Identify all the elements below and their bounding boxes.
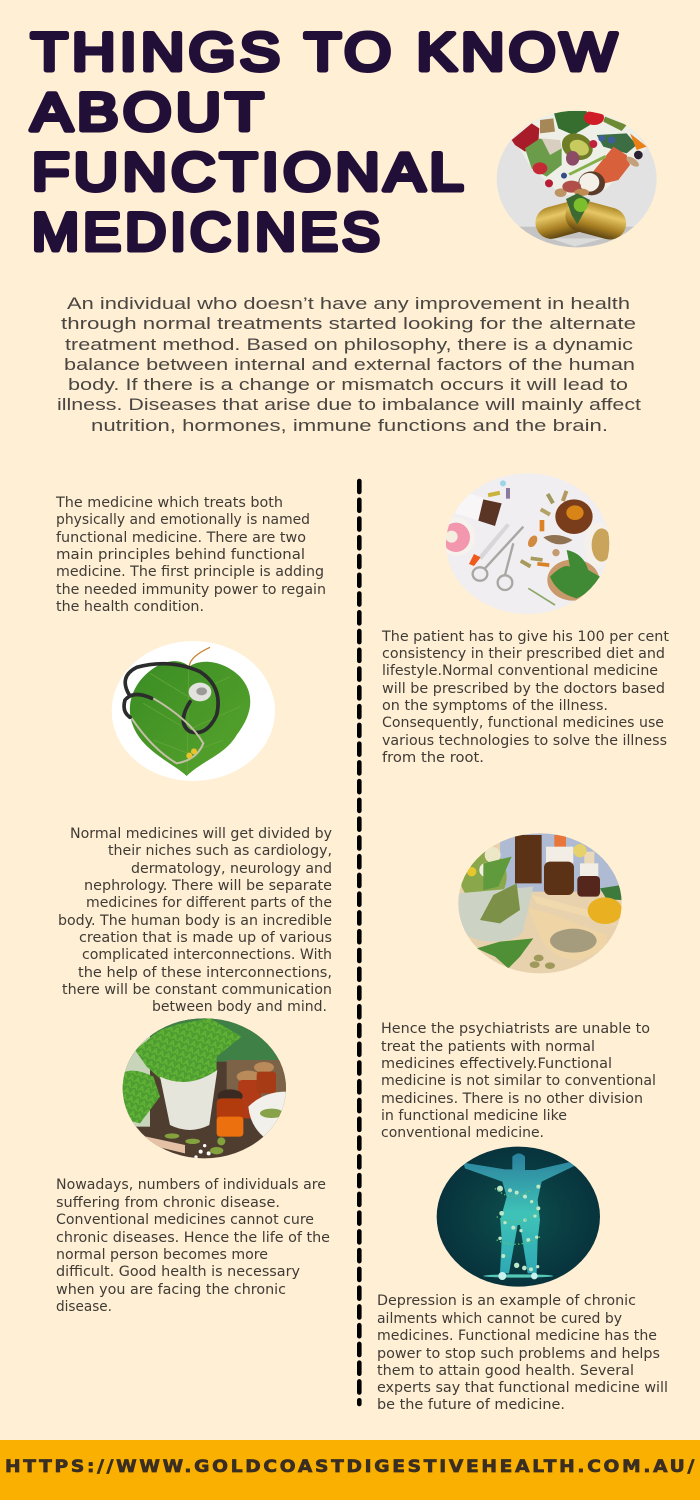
text block: niches of normal medicine: [58, 826, 332, 1015]
text block: niches of normal medicine: there will be constant communication: [62, 982, 332, 998]
intro paragraph: body. If there is a change or mismatch occurs it will lead to: [68, 376, 628, 394]
text block: niches of normal medicine: dermatology, neurology and: [131, 861, 332, 877]
image: stethoscope on a green heart-shaped leaf: [112, 641, 275, 781]
text block: patient consistency: [381, 629, 669, 766]
intro paragraph: [57, 295, 642, 435]
text block: niches of normal medicine: Normal medicines will get divided by: [70, 826, 332, 842]
text block: chronic disease: [56, 1177, 330, 1315]
text block: depression and the future of medicine: be the future of medicine.: [377, 1397, 565, 1413]
text block: psychiatrists and conventional medicine: Hence the psychiatrists are unable to: [381, 1021, 650, 1037]
text block: niches of normal medicine: the help of these interconnections,: [78, 965, 332, 981]
text block: chronic disease: when you are facing the chronic: [56, 1282, 286, 1298]
text block: niches of normal medicine: creation that is made up of various: [79, 930, 332, 946]
text block: patient consistency: on the symptoms of the illness.: [382, 698, 608, 714]
text block: chronic disease: suffering from chronic disease.: [56, 1195, 280, 1211]
text block: depression and the future of medicine: [377, 1293, 668, 1413]
footer bar with website URL: [0, 1440, 700, 1500]
text block: niches of normal medicine: complicated interconnections. With: [82, 947, 332, 963]
text block: psychiatrists and conventional medicine: in functional medicine like: [381, 1108, 567, 1124]
text block: chronic disease: Conventional medicines cannot cure: [56, 1212, 314, 1228]
text block: chronic disease: difficult. Good health is necessary: [56, 1264, 300, 1280]
text block: depression and the future of medicine: experts say that functional medicine will: [377, 1380, 668, 1396]
intro paragraph: nutrition, hormones, immune functions and the brain.: [91, 417, 608, 435]
text block: chronic disease: normal person becomes more: [56, 1247, 268, 1263]
text block: what functional medicine is: medicine. The first principle is adding: [56, 564, 324, 580]
text block: chronic disease: disease.: [56, 1299, 112, 1315]
title: ABOUT: [31, 83, 268, 142]
text block: psychiatrists and conventional medicine: treat the patients with normal: [381, 1039, 595, 1055]
intro paragraph: An individual who doesn’t have any improvement in health: [67, 295, 630, 313]
text block: depression and the future of medicine: ailments which cannot be cured by: [377, 1311, 622, 1327]
text block: psychiatrists and conventional medicine: conventional medicine.: [381, 1125, 544, 1141]
text block: psychiatrists and conventional medicine: medicine is not similar to conventional: [381, 1073, 656, 1089]
intro paragraph: treatment method. Based on philosophy, there is a dynamic: [65, 336, 633, 354]
text block: chronic disease: chronic diseases. Hence the life of the: [56, 1230, 330, 1246]
title: FUNCTIONAL: [32, 143, 468, 202]
vertical dashed divider: [357, 481, 362, 1404]
text block: psychiatrists and conventional medicine: [381, 1021, 656, 1141]
text block: what functional medicine is: functional medicine. There are two: [56, 530, 306, 546]
text block: what functional medicine is: the needed immunity power to regain: [56, 582, 326, 598]
text block: patient consistency: consistency in their prescribed diet and: [382, 646, 665, 662]
text block: what functional medicine is: The medicine which treats both: [55, 495, 283, 511]
text block: what functional medicine is: physically and emotionally is named: [56, 512, 310, 528]
image: pills, scissors and herbs on white: [446, 474, 610, 614]
text block: patient consistency: from the root.: [382, 750, 484, 766]
text block: patient consistency: Consequently, functional medicines use: [382, 715, 664, 731]
footer bar with website URL: HTTPS://WWW.GOLDCOASTDIGESTIVEHEALTH.COM.AU/: [5, 1457, 697, 1476]
text block: patient consistency: various technologies to solve the illness: [382, 733, 667, 749]
text block: patient consistency: lifestyle.Normal conventional medicine: [382, 663, 658, 679]
intro paragraph: illness. Diseases that arise due to imbalance will mainly affect: [57, 396, 642, 414]
text block: depression and the future of medicine: them to attain good health. Several: [377, 1363, 634, 1379]
text block: psychiatrists and conventional medicine: medicines. There is no other division: [381, 1091, 643, 1107]
image: herbs, dropper bottles and capsules on spoons: [457, 832, 623, 975]
title: MEDICINES: [32, 203, 384, 262]
text block: niches of normal medicine: between body and mind.: [152, 999, 327, 1015]
text block: depression and the future of medicine: Depression is an example of chronic: [377, 1293, 636, 1309]
text block: what functional medicine is: main principles behind functional: [56, 547, 305, 563]
text block: patient consistency: will be prescribed by the doctors based: [382, 681, 665, 697]
image: glowing human body with DNA helix: [435, 1145, 605, 1288]
text block: niches of normal medicine: their niches such as cardiology,: [108, 843, 332, 859]
text block: niches of normal medicine: nephrology. There will be separate: [84, 878, 332, 894]
title: [31, 23, 621, 262]
text block: niches of normal medicine: body. The human body is an incredible: [58, 913, 332, 929]
text block: what functional medicine is: [55, 495, 326, 615]
text block: patient consistency: The patient has to give his 100 per cent: [381, 629, 669, 645]
image: vegetables and fruit pouring into a golden capsule: [496, 110, 656, 248]
text block: psychiatrists and conventional medicine: medicines effectively.Functional: [381, 1056, 612, 1072]
text block: niches of normal medicine: medicines for different parts of the: [86, 895, 332, 911]
intro paragraph: balance between internal and external factors of the human: [64, 356, 635, 374]
text block: what functional medicine is: the health condition.: [56, 599, 204, 615]
text block: depression and the future of medicine: power to stop such problems and helps: [377, 1346, 660, 1362]
title: THINGS TO KNOW: [31, 23, 621, 82]
text block: chronic disease: Nowadays, numbers of individuals are: [56, 1177, 326, 1193]
image: fern in a white pot with amber bottles: [120, 1017, 290, 1160]
intro paragraph: through normal treatments started looking for the alternate: [61, 315, 636, 333]
text block: depression and the future of medicine: medicines. Functional medicine has the: [377, 1328, 657, 1344]
